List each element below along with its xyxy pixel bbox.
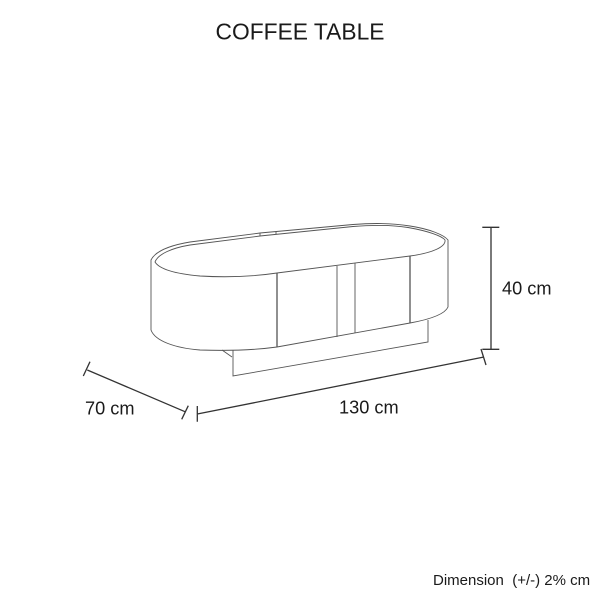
title: COFFEE TABLE	[216, 18, 384, 44]
top edge notch	[260, 232, 276, 236]
height label: 40 cm	[502, 278, 552, 298]
door dividers	[277, 256, 410, 347]
illustration: coffee table	[151, 224, 448, 376]
tolerance note: Dimension (+/-) 2% cm	[433, 572, 590, 589]
table body outline	[151, 224, 448, 350]
inner rim and top surface	[155, 225, 445, 277]
height dimension line	[482, 227, 499, 349]
base plinth	[222, 320, 428, 376]
width label: 130 cm	[339, 398, 399, 418]
depth label: 70 cm	[85, 398, 135, 418]
width dimension line	[197, 349, 486, 422]
depth dimension line	[83, 362, 188, 419]
